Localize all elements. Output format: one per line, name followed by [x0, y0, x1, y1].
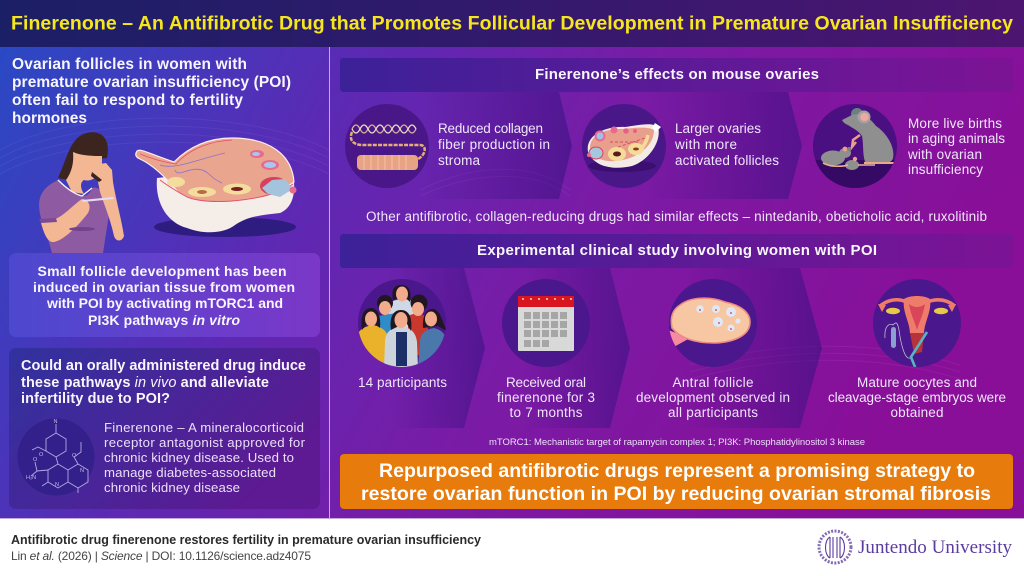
section header: mouse ovaries	[340, 58, 1013, 92]
illustration: woman holding pregnancy test	[39, 132, 124, 253]
caption: cleavage-stage embryos were	[828, 390, 1006, 405]
Juntendo University logo: Juntendo University	[858, 537, 1012, 558]
caption: fiber production in	[438, 137, 550, 152]
icon: mouse with pups	[813, 108, 897, 190]
caption	[636, 375, 790, 420]
finerenone description: chronic kidney disease. Used to	[104, 450, 294, 465]
caption: with ovarian	[907, 147, 982, 162]
icon: group of women	[358, 285, 448, 368]
caption: finerenone for 3	[497, 390, 595, 405]
note: other antifibrotic drugs: Other antifibrotic, collagen-reducing drugs had similar effects – nintedanib, obeticholic acid, ruxolitinib	[366, 209, 987, 224]
finerenone description: receptor antagonist approved for	[104, 435, 306, 450]
conclusion banner: restore ovarian function in POI by reducing ovarian stromal fibrosis	[361, 483, 991, 505]
icon: enlarged ovary	[587, 123, 661, 172]
caption: insufficiency	[908, 162, 983, 177]
callout: in vitro finding: PI3K pathways in vitro	[88, 312, 240, 328]
icon: ovary with antral follicles	[670, 297, 751, 346]
caption	[907, 116, 1005, 177]
chevrons: clinical steps	[340, 268, 822, 428]
callout: in vitro finding: Small follicle development has been	[38, 263, 286, 279]
citation: Lin et al. (2026) | Science | DOI: 10.1126/science.adz4075	[11, 549, 311, 563]
icon: finerenone molecule: N	[80, 468, 84, 474]
step: more live births	[813, 104, 1005, 190]
question heading: these pathways in vivo and alleviate	[21, 375, 269, 391]
question heading: infertility due to POI?	[21, 391, 170, 407]
icon: calendar	[518, 296, 574, 351]
section header: clinical study: Experimental clinical study involving women with POI	[477, 242, 877, 259]
callout: in vitro finding	[9, 253, 320, 337]
section header: mouse ovaries: Finerenone’s effects on mouse ovaries	[535, 66, 819, 83]
conclusion banner: Repurposed antifibrotic drugs represent a promising strategy to	[379, 460, 975, 482]
caption: stroma	[438, 153, 480, 168]
intro heading: premature ovarian insufficiency (POI)	[12, 74, 291, 91]
callout: in vitro finding: with POI by activating mTORC1 and	[46, 295, 283, 311]
section header: clinical study	[340, 234, 1013, 268]
caption	[438, 121, 550, 168]
intro heading	[12, 56, 291, 127]
caption: Mature oocytes and	[857, 375, 977, 390]
finerenone description	[104, 420, 306, 495]
conclusion banner	[340, 454, 1013, 509]
footer	[0, 518, 1024, 576]
caption: 14 participants	[358, 375, 447, 390]
caption: all participants	[668, 405, 758, 420]
intro heading: hormones	[12, 110, 87, 127]
Juntendo University logo	[819, 531, 1012, 563]
intro heading: Ovarian follicles in women with	[12, 56, 247, 73]
caption: activated follicles	[675, 153, 779, 168]
icon: finerenone molecule	[18, 418, 94, 496]
icon: uterus and collection instruments	[878, 296, 956, 372]
step: 14 participants	[358, 279, 448, 390]
caption: obtained	[890, 405, 944, 420]
question heading: Could an orally administered drug induce	[21, 358, 306, 374]
abbreviations footnote: mTORC1: Mechanistic target of rapamycin complex 1; PI3K: Phosphatidylinositol 3 kinase	[489, 437, 865, 448]
caption	[674, 121, 779, 168]
caption: Antral follicle	[672, 375, 754, 390]
step: oocytes and embryos	[828, 279, 1006, 420]
caption: Reduced collagen	[438, 121, 543, 136]
caption: Larger ovaries	[675, 121, 761, 136]
caption	[828, 375, 1006, 420]
icon: finerenone molecule: O	[72, 453, 77, 459]
caption: to 7 months	[510, 405, 583, 420]
illustration: ovary cross-section	[136, 138, 296, 237]
panel: research question and finerenone	[9, 348, 320, 509]
title banner	[0, 0, 1024, 47]
intro heading: often fail to respond to fertility	[12, 92, 243, 109]
step: reduced collagen	[345, 104, 550, 188]
step: oral finerenone	[497, 279, 595, 420]
icon: finerenone molecule: N	[54, 419, 58, 425]
icon: finerenone molecule: N	[55, 482, 59, 488]
citation: Antifibrotic drug finerenone restores fertility in premature ovarian insufficiency	[11, 533, 481, 547]
caption: development observed in	[636, 390, 790, 405]
title banner: Finerenone – An Antifibrotic Drug that Promotes Follicular Development in Premature Ovarian Insufficiency	[11, 12, 1013, 34]
caption: More live births	[908, 116, 1002, 131]
finerenone description: manage diabetes-associated	[104, 465, 276, 480]
icon: finerenone molecule: O	[33, 457, 38, 463]
caption	[497, 375, 595, 420]
callout: in vitro finding: induced in ovarian tissue from women	[33, 279, 295, 295]
caption: Received oral	[506, 375, 586, 390]
icon: collagen fibre	[351, 125, 425, 170]
icon: finerenone molecule: H₂N	[26, 475, 36, 481]
icon: finerenone molecule: O	[39, 452, 44, 458]
caption: with more	[674, 137, 737, 152]
finerenone description: Finerenone – A mineralocorticoid	[104, 420, 304, 435]
question heading	[21, 358, 306, 407]
finerenone description: chronic kidney disease	[104, 480, 240, 495]
citation	[11, 533, 481, 563]
caption: in aging animals	[908, 131, 1005, 146]
chevrons: mouse effects	[340, 92, 802, 199]
step: antral follicles	[636, 279, 790, 420]
step: larger ovaries	[582, 104, 779, 188]
